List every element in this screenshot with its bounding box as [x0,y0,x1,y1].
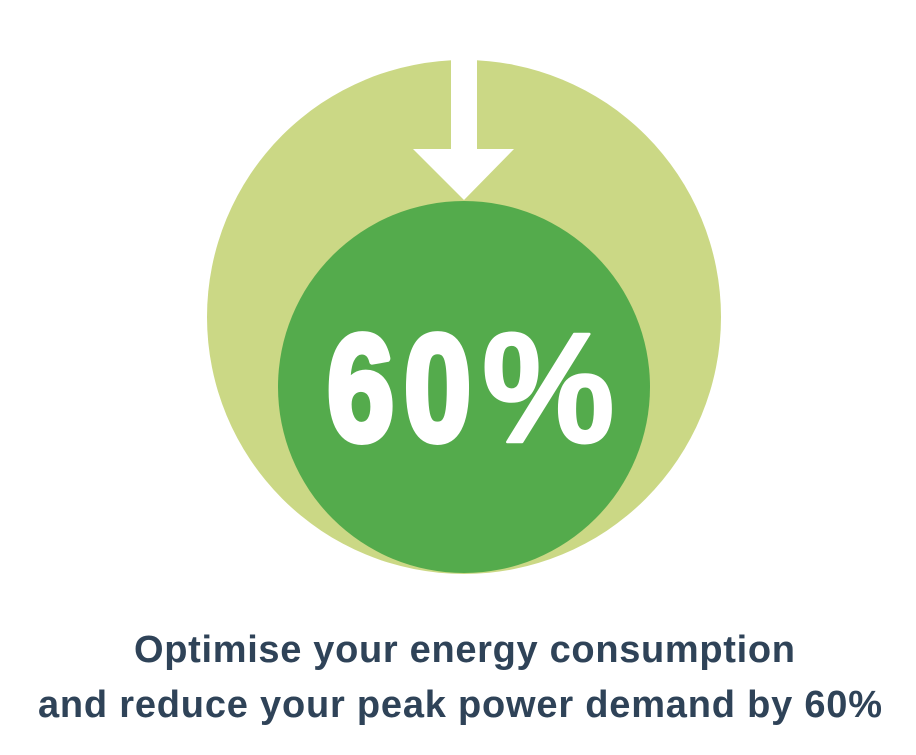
caption line 2: and reduce your peak power demand by 60% [38,684,882,726]
caption [38,629,882,726]
outer light green circle [207,60,721,574]
percent sign: % [482,301,615,476]
digit 0: 0 [404,303,471,472]
icon: downward arrow [413,58,514,200]
caption line 1: Optimise your energy consumption [134,629,795,671]
big percentage number [327,301,615,476]
digit 6: 6 [327,303,394,472]
inner dark green circle [278,201,650,573]
